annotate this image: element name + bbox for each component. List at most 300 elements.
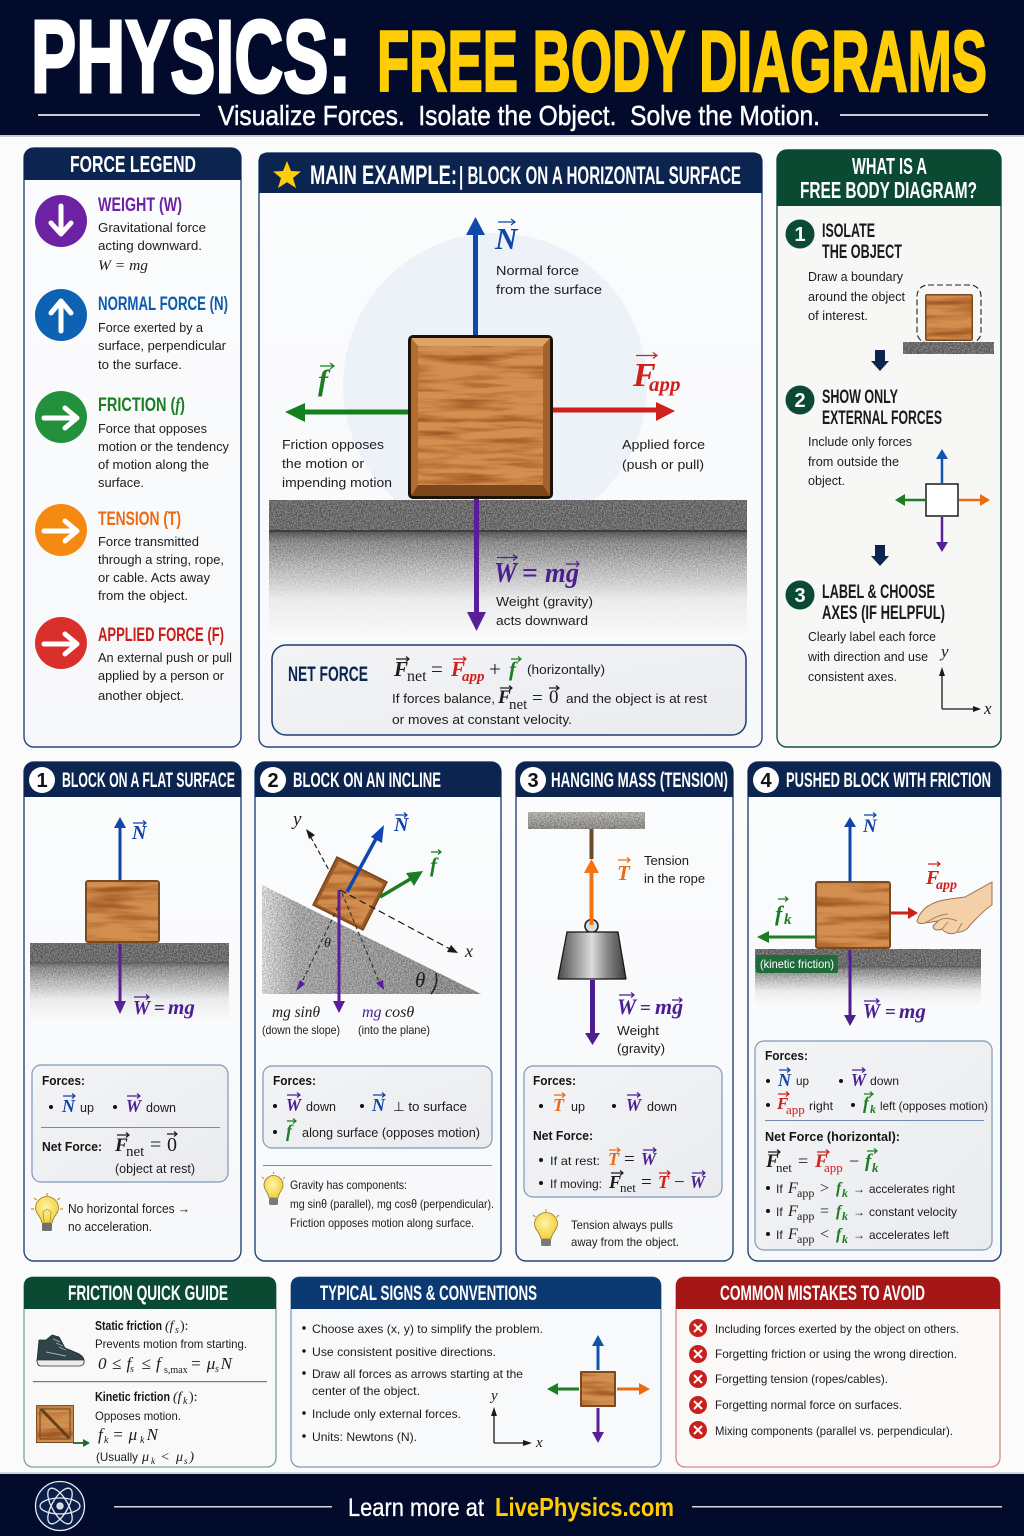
net force equation: = — [431, 657, 443, 681]
net force explanation: F — [497, 687, 511, 708]
condition: accelerates left: If — [776, 1228, 783, 1242]
legend item: friction: motion or the tendency — [98, 439, 229, 454]
diagram: cosθ — [385, 1004, 414, 1021]
forces box: − — [674, 1172, 685, 1193]
condition: constant velocity: f — [836, 1203, 843, 1220]
heading: main example: | BLOCK ON A HORIZONTAL SURFACE — [459, 162, 741, 190]
net force explanation: or moves at constant velocity. — [392, 712, 572, 727]
net force equation: f — [865, 1151, 873, 1172]
diagram: mg — [362, 1004, 382, 1021]
condition: accelerates left: f — [836, 1226, 843, 1243]
diagram — [30, 817, 229, 1022]
forces box: Forces: — [273, 1073, 316, 1088]
kinetic friction: k — [183, 1396, 188, 1407]
wood block — [408, 335, 553, 499]
diagram: = — [640, 998, 651, 1019]
kinetic friction: s — [184, 1456, 188, 1466]
mistake 1: Including forces exerted by the object on others. — [715, 1322, 959, 1336]
tip: tension always pulls: Tension always pulls — [571, 1218, 673, 1232]
legend item: weight: acting downward. — [98, 238, 202, 253]
forces box: up — [796, 1074, 809, 1088]
diagram — [528, 812, 705, 1056]
condition: accelerates left — [766, 1226, 950, 1246]
tip: gravity components: Gravity has components: — [290, 1178, 407, 1192]
step 1: isolate: of interest. — [808, 308, 868, 323]
icon: star — [273, 161, 301, 188]
legend item: tension — [35, 504, 224, 603]
forces box: W — [126, 1096, 143, 1116]
kinetic friction — [95, 1389, 198, 1466]
link text: LivePhysics.com — [495, 1492, 674, 1522]
forces box: T — [608, 1149, 620, 1169]
mistake 4 — [689, 1396, 902, 1414]
heading: HANGING MASS (TENSION) — [551, 769, 728, 792]
forces box: left (opposes motion) — [880, 1099, 988, 1113]
kinetic friction: k — [151, 1456, 156, 1466]
legend item: normal force: Force exerted by a — [98, 320, 204, 335]
heading — [753, 767, 991, 793]
forces box: Net Force: — [533, 1128, 593, 1143]
condition: constant velocity — [766, 1203, 957, 1223]
mistake 5: Mixing components (parallel vs. perpendicular). — [715, 1424, 953, 1438]
tip: tension always pulls — [533, 1209, 679, 1249]
list of conventions: center of the object. — [312, 1384, 420, 1398]
diagram: F — [925, 867, 940, 889]
label: applied force: Applied force — [622, 437, 705, 452]
condition: accelerates right: f — [836, 1180, 843, 1197]
step 3: label axes: with direction and use — [807, 649, 928, 664]
diagram: = — [885, 1002, 896, 1023]
diagram: (gravity) — [617, 1041, 665, 1056]
list of conventions: Choose axes (x, y) to simplify the problem. — [312, 1322, 543, 1336]
label: applied force: F — [632, 357, 656, 394]
static friction: Prevents motion from starting. — [95, 1337, 247, 1351]
surface — [269, 500, 747, 640]
net force equation: (horizontally) — [527, 662, 605, 677]
forces box: right — [809, 1099, 834, 1113]
diagram: W — [617, 994, 637, 1019]
panel 2: block on an incline — [255, 762, 501, 1261]
forces box: T — [553, 1095, 565, 1115]
heading — [29, 767, 235, 793]
forces box — [32, 1065, 228, 1182]
legend item: tension: or cable. Acts away — [98, 570, 210, 585]
legend item: friction — [35, 391, 229, 490]
static friction: s — [215, 1364, 219, 1375]
net force equation: app — [824, 1160, 843, 1175]
condition: accelerates right — [766, 1180, 956, 1200]
legend item: applied force: APPLIED FORCE (F) — [98, 625, 224, 646]
net force equation — [393, 656, 605, 685]
condition: accelerates right: k — [842, 1186, 848, 1200]
tag: kinetic friction: (kinetic friction) — [760, 957, 834, 971]
diagram: θ — [415, 968, 425, 992]
panel: what is a free body diagram — [777, 150, 1001, 747]
heading — [260, 767, 441, 793]
icon: bulb — [533, 1209, 559, 1246]
condition: accelerates left: k — [842, 1232, 848, 1246]
forces box: W — [690, 1172, 707, 1192]
footer — [0, 1472, 1024, 1536]
heading: main example — [310, 160, 741, 190]
panel 3: hanging mass — [516, 762, 733, 1261]
heading: BLOCK ON AN INCLINE — [293, 769, 441, 792]
diagram: W — [863, 999, 881, 1023]
list of conventions: Units: Newtons (N). — [312, 1430, 417, 1444]
label: normal force — [494, 219, 602, 297]
diagram: mg — [168, 995, 195, 1019]
label: weight: W — [494, 558, 519, 589]
label: applied force: (push or pull) — [622, 457, 704, 472]
label: applied force: app — [649, 372, 680, 396]
condition: constant velocity: constant velocity — [869, 1205, 957, 1219]
legend item: weight: W = mg — [98, 258, 149, 274]
forces box: N — [371, 1095, 386, 1115]
static friction — [95, 1318, 247, 1376]
diagram: T — [617, 861, 631, 885]
heading — [520, 767, 728, 793]
label: normal force: Normal force — [496, 263, 579, 278]
net force equation: F — [393, 657, 408, 681]
step 3: label axes: AXES (IF HELPFUL) — [822, 603, 945, 624]
label: weight: acts downward — [496, 613, 588, 628]
diagram: app — [936, 878, 957, 893]
step 2: external forces: from outside the — [808, 454, 899, 469]
forces box: k — [870, 1102, 876, 1116]
legend item: applied force: An external push or pull — [98, 650, 232, 665]
legend item: applied force: applied by a person or — [98, 668, 225, 683]
net force equation: F — [814, 1151, 828, 1172]
forces box: Forces: — [42, 1073, 85, 1088]
diagram: (into the plane) — [358, 1023, 430, 1037]
heading: 2 — [268, 770, 279, 792]
kinetic friction: ): — [189, 1390, 198, 1405]
kinetic friction: Kinetic friction — [95, 1389, 170, 1404]
label: normal force: from the surface — [496, 282, 602, 297]
forces box: up — [80, 1100, 94, 1115]
forces box — [524, 1066, 722, 1197]
forces box: down — [146, 1100, 176, 1115]
net force equation — [765, 1148, 879, 1175]
condition: accelerates right: F — [787, 1180, 798, 1197]
heading: TYPICAL SIGNS & CONVENTIONS — [320, 1282, 537, 1305]
subtitle: Visualize Forces. Isolate the Object. Solve the Motion. — [218, 100, 820, 131]
condition: constant velocity: → — [853, 1205, 865, 1219]
step 2: external forces: 2 — [794, 390, 806, 412]
diagram: x — [464, 941, 473, 961]
static friction: s — [175, 1325, 179, 1336]
legend item: normal force — [35, 289, 228, 372]
mistake 3 — [689, 1370, 888, 1388]
forces box: = — [150, 1134, 161, 1156]
label: weight — [494, 554, 593, 628]
link text — [348, 1492, 674, 1522]
net force equation: net — [776, 1160, 792, 1175]
diagram: (down the slope) — [262, 1023, 340, 1037]
forces box: T — [658, 1172, 670, 1192]
forces box: along surface (opposes motion) — [302, 1125, 480, 1140]
icon: axes: y — [939, 642, 949, 661]
legend item: normal force: NORMAL FORCE (N) — [98, 294, 228, 315]
forces box: f — [863, 1093, 871, 1113]
kinetic friction: k — [104, 1435, 109, 1446]
diagram: mg — [899, 999, 926, 1023]
arrow: friction — [285, 403, 408, 422]
forces box: 0 — [167, 1134, 177, 1156]
condition: accelerates right: If — [776, 1182, 783, 1196]
condition: accelerates left: → — [853, 1228, 865, 1242]
net force equation: f — [509, 657, 518, 681]
axes: y — [489, 1388, 498, 1404]
arrow: weight — [467, 498, 486, 631]
net force explanation: If forces balance, — [392, 691, 495, 706]
forces box: W — [641, 1149, 658, 1169]
legend item: applied force: another object. — [98, 688, 184, 703]
legend item: normal force: to the surface. — [98, 357, 182, 372]
forces box: F — [776, 1094, 789, 1113]
step 3: label axes: LABEL & CHOOSE — [822, 582, 935, 603]
forces box: down — [306, 1099, 336, 1114]
icon: bulb — [262, 1172, 285, 1205]
icon: crate — [36, 1405, 90, 1447]
diagram: k — [784, 912, 792, 928]
label: friction: impending motion — [282, 475, 392, 490]
step 3: label axes: 3 — [794, 585, 806, 607]
forces box: Net Force (horizontal): — [765, 1129, 900, 1144]
condition: constant velocity: If — [776, 1205, 783, 1219]
kinetic friction: Opposes motion. — [95, 1409, 181, 1423]
forces box: up — [571, 1099, 585, 1114]
static friction: ): — [180, 1319, 189, 1334]
heading: what is: WHAT IS A — [852, 153, 927, 179]
label: friction: Friction opposes — [282, 437, 385, 452]
heading: 1 — [36, 770, 48, 792]
net force equation: = — [798, 1151, 808, 1171]
kinetic friction: f = μ N — [98, 1425, 160, 1444]
title: PHYSICS: — [31, 0, 351, 114]
label: applied force — [622, 352, 705, 472]
label: friction — [282, 363, 392, 490]
net force equation: k — [872, 1160, 879, 1175]
diagram: y — [291, 809, 302, 830]
diagram — [755, 812, 992, 1026]
label: normal force: N — [494, 221, 519, 256]
kinetic friction: (Usually — [96, 1450, 138, 1464]
forces box: N — [777, 1070, 792, 1090]
heading: 4 — [760, 770, 772, 792]
condition: accelerates left: app — [797, 1232, 814, 1246]
legend item: weight: WEIGHT (W) — [98, 195, 182, 216]
heading: what is — [800, 153, 977, 203]
tip: no horizontal forces: no acceleration. — [68, 1219, 152, 1234]
forces box: app — [786, 1102, 805, 1117]
step 3: label axes — [786, 580, 992, 718]
condition: accelerates right: → — [853, 1182, 865, 1196]
link text: Learn more at — [348, 1494, 484, 1522]
condition: constant velocity: = — [820, 1203, 829, 1220]
label: friction: the motion or — [282, 456, 365, 471]
forces box — [263, 1066, 492, 1148]
mistake 1 — [689, 1319, 959, 1337]
step 1: isolate: Draw a boundary — [808, 269, 903, 284]
diagram: mg sinθ — [272, 1004, 320, 1021]
arrow: applied force — [553, 402, 675, 421]
net force equation: − — [849, 1151, 859, 1171]
background halo — [343, 233, 647, 537]
step 1: isolate: 1 — [794, 224, 806, 246]
forces box: F — [608, 1172, 621, 1192]
label: weight: Weight (gravity) — [496, 594, 593, 609]
net force equation: F — [450, 657, 465, 681]
label: weight: = — [522, 558, 538, 589]
icon: hand — [917, 882, 992, 934]
icon: free body square — [895, 449, 990, 552]
tip: gravity components — [262, 1165, 494, 1230]
title — [31, 0, 987, 114]
net force box: NET FORCE — [288, 663, 368, 686]
tip: no horizontal forces: No horizontal forces → — [68, 1201, 190, 1216]
net force box — [272, 645, 746, 735]
diagram: θ — [324, 936, 331, 951]
legend item: friction: surface. — [98, 475, 144, 490]
diagram: N — [131, 822, 148, 844]
label: weight: mg — [545, 557, 579, 589]
net force explanation: net — [509, 697, 528, 713]
net force equation: net — [407, 668, 427, 685]
step 1: isolate: around the object — [808, 289, 905, 304]
axes — [489, 1388, 543, 1451]
list of conventions: Draw all forces as arrows starting at the — [312, 1367, 523, 1381]
forces box: = — [641, 1172, 652, 1193]
arrow: step down 2 — [871, 545, 889, 566]
static friction: 0 ≤ f ≤ f = μ N — [98, 1354, 234, 1373]
condition: accelerates left: accelerates left — [869, 1228, 950, 1242]
diagram: Tension — [644, 853, 689, 868]
axes: x — [535, 1435, 543, 1451]
forces box: W — [851, 1070, 868, 1090]
panel: typical signs and conventions — [291, 1277, 661, 1467]
heading: force legend: FORCE LEGEND — [70, 151, 196, 177]
step 1: isolate — [786, 220, 994, 354]
legend item: friction: of motion along the — [98, 457, 209, 472]
condition: constant velocity: F — [787, 1203, 798, 1220]
static friction: s — [130, 1364, 134, 1375]
forces box: Net Force: — [42, 1139, 102, 1154]
forces box: W — [626, 1095, 643, 1115]
panel: common mistakes — [676, 1277, 1000, 1467]
legend item: weight: Gravitational force — [98, 220, 206, 235]
forces box: F — [114, 1135, 128, 1156]
net force equation: F — [765, 1151, 779, 1172]
net force explanation: = — [532, 688, 543, 709]
net force equation: app — [462, 669, 485, 685]
condition: constant velocity: k — [842, 1209, 848, 1223]
forces box: ⊥ to surface — [393, 1099, 467, 1114]
tip: gravity components: Friction opposes motion along surface. — [290, 1216, 474, 1230]
mistake 4: Forgetting normal force on surfaces. — [715, 1398, 902, 1412]
diagram: Weight — [617, 1023, 659, 1038]
forces box: f — [286, 1121, 294, 1141]
forces box: down — [870, 1074, 899, 1088]
diagram: N — [862, 816, 878, 837]
diagram: mg — [655, 994, 683, 1019]
legend item: weight — [35, 195, 206, 274]
legend item: tension: Force transmitted — [98, 534, 199, 549]
icon: isolated block — [903, 285, 994, 354]
legend item: tension: TENSION (T) — [98, 509, 181, 530]
kinetic friction: k — [140, 1435, 145, 1446]
condition: accelerates left: F — [787, 1226, 798, 1243]
header banner — [0, 0, 1024, 137]
heading: main example: MAIN EXAMPLE: — [310, 160, 457, 190]
legend item: applied force — [35, 617, 232, 703]
diagram: f — [775, 901, 785, 926]
step 3: label axes: consistent axes. — [808, 669, 897, 684]
diagram — [262, 809, 481, 1037]
tip: gravity components: mg sinθ (parallel), mg cosθ (perpendicular). — [290, 1197, 494, 1211]
forces box: Forces: — [533, 1073, 576, 1088]
forces box: down — [647, 1099, 677, 1114]
forces box: If moving: — [550, 1177, 602, 1191]
step 2: external forces: EXTERNAL FORCES — [822, 408, 942, 429]
kinetic friction: μ < μ ) — [141, 1450, 194, 1465]
step 1: isolate: ISOLATE — [822, 221, 875, 242]
icon: shoe — [37, 1335, 84, 1366]
condition: accelerates right: > — [820, 1180, 829, 1197]
forces box: W — [286, 1095, 303, 1115]
icon: axes: x — [983, 699, 992, 718]
arrow: normal force — [466, 217, 485, 336]
net force equation: + — [489, 657, 501, 681]
mistake 2: Forgetting friction or using the wrong direction. — [715, 1347, 957, 1361]
mistake 2 — [689, 1345, 957, 1363]
arrow: step down 1 — [871, 350, 889, 371]
diagram: = — [154, 998, 165, 1019]
static friction: s,max — [164, 1365, 188, 1376]
static friction: (f — [165, 1319, 176, 1334]
forces box: N — [61, 1096, 76, 1116]
panel: force legend — [24, 148, 241, 747]
step 2: external forces: SHOW ONLY — [822, 387, 898, 408]
list of conventions — [302, 1322, 543, 1444]
heading: BLOCK ON A FLAT SURFACE — [62, 769, 235, 792]
mistake 3: Forgetting tension (ropes/cables). — [715, 1372, 888, 1386]
label: friction: f — [318, 364, 331, 397]
net force explanation — [392, 686, 707, 727]
kinetic friction: (f — [173, 1390, 184, 1405]
tip: no horizontal forces — [31, 1193, 190, 1234]
heading: FRICTION QUICK GUIDE — [68, 1282, 228, 1305]
panel 1: block on a flat surface — [24, 762, 241, 1261]
forces box: net — [620, 1180, 636, 1195]
forces box: If at rest: — [550, 1154, 600, 1168]
legend item: tension: from the object. — [98, 588, 188, 603]
condition: accelerates right: app — [797, 1186, 814, 1200]
icon: bulb — [31, 1193, 63, 1231]
condition: accelerates left: < — [820, 1226, 829, 1243]
legend item: friction: Force that opposes — [98, 421, 207, 436]
step 2: external forces: Include only forces — [808, 434, 912, 449]
panel: main example — [259, 153, 762, 747]
mistake 5 — [689, 1421, 953, 1439]
forces box: (object at rest) — [115, 1161, 195, 1176]
panel 4: pushed block with friction — [748, 762, 1001, 1261]
diagram: W — [133, 997, 151, 1019]
diagram: N — [393, 814, 410, 836]
list of conventions: Include only external forces. — [312, 1407, 461, 1421]
heading: 3 — [528, 770, 539, 792]
step 3: label axes: Clearly label each force — [808, 629, 936, 644]
